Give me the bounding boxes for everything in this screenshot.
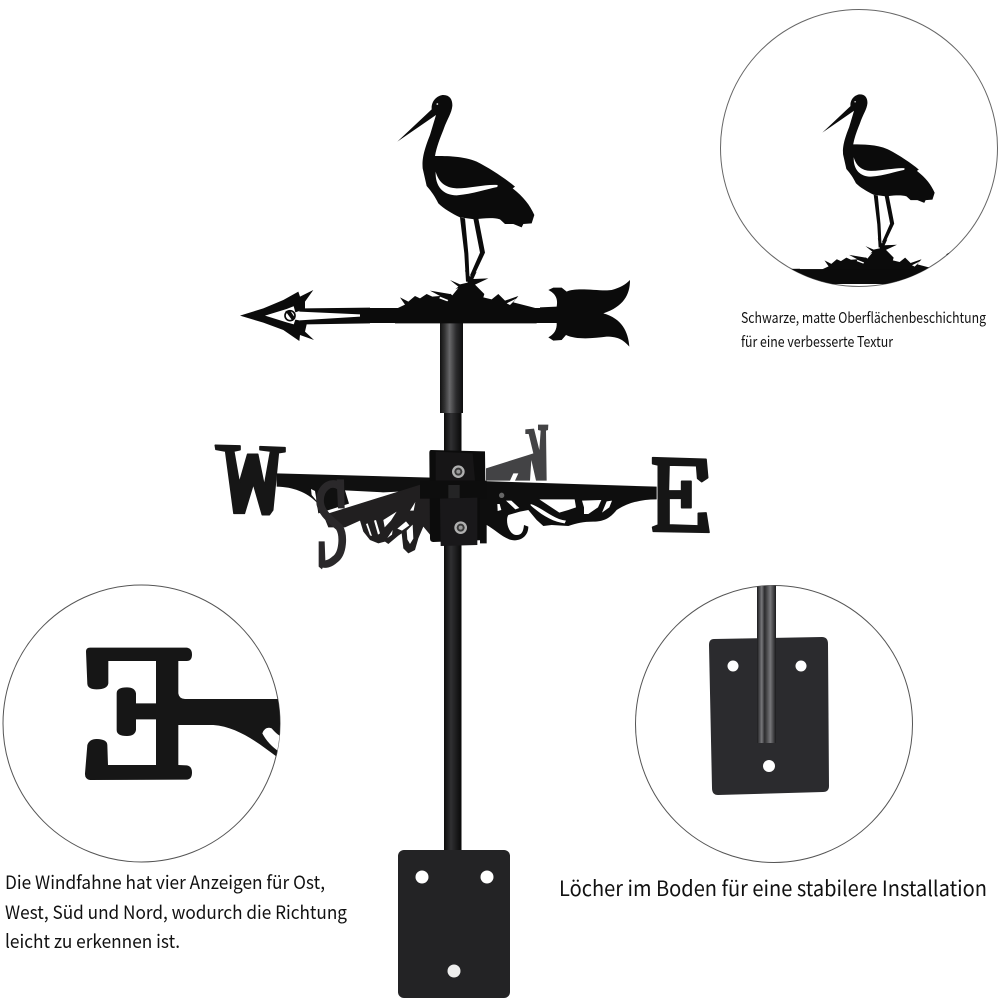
base plate (398, 850, 510, 998)
icon: stork close-up (791, 94, 950, 284)
letter W (215, 445, 285, 515)
south arm with scrollwork (319, 479, 432, 569)
pole: thin lower rod (444, 405, 462, 852)
panel: base plate detail circle (636, 585, 912, 862)
icon: stork on arrow vane (240, 95, 630, 347)
east arm and scrollwork (480, 481, 657, 543)
west arm (215, 445, 432, 515)
letter S (320, 484, 342, 564)
compass arms with letters (215, 425, 709, 569)
pole: thick upper sleeve (440, 322, 463, 413)
panel: stork detail circle (720, 9, 998, 287)
mounting bracket (420, 450, 657, 546)
text: direction description: Die Windfahne hat vier Anzeigen für Ost, (5, 869, 325, 895)
bolt upper (452, 465, 465, 478)
text: installation description: Löcher im Boden für eine stabilere Installation (559, 873, 987, 903)
text: coating description: für eine verbesserte Textur (741, 331, 893, 352)
icon: letter E close-up (85, 648, 282, 780)
letter E (653, 458, 709, 532)
panel: E letter detail circle (3, 585, 282, 862)
icon: base plate close-up (709, 585, 829, 795)
letter N and rear arm (486, 425, 548, 481)
bolt lower (454, 521, 467, 534)
text: direction description: leicht zu erkennen ist. (5, 928, 180, 954)
text: direction description: West, Süd und Nord, wodurch die Richtung (5, 899, 348, 925)
panel: main weather vane (215, 95, 709, 998)
